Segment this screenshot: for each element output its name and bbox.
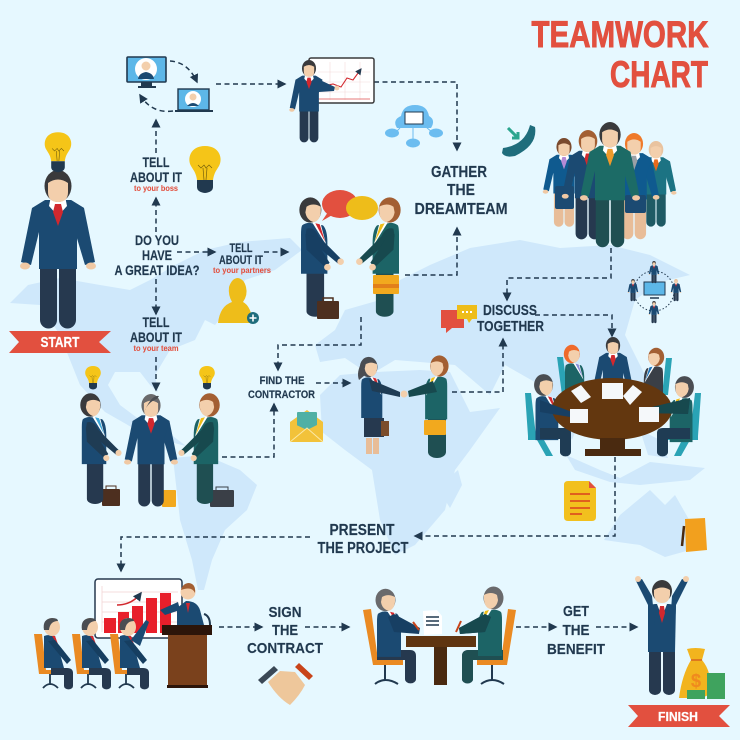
gather text: DREAMTEAM [414, 201, 508, 218]
question text: HAVE [142, 248, 172, 263]
start ribbon: START [40, 334, 80, 351]
icon: cloud network [385, 105, 443, 148]
tell boss [130, 155, 183, 193]
partner man right with orange case [356, 197, 401, 317]
present text: PRESENT [330, 522, 395, 539]
icon: document [564, 481, 596, 521]
chart board and presenter [289, 58, 374, 142]
get the benefit text: BENEFIT [547, 641, 605, 658]
sign text: SIGN [268, 604, 302, 621]
icon: envelope [290, 410, 323, 442]
meeting table scene [525, 337, 701, 456]
finish ribbon [628, 705, 730, 727]
sign text: THE [272, 622, 298, 639]
three team men [80, 393, 234, 507]
title: CHART [610, 54, 708, 95]
sign text: CONTRACT [247, 640, 323, 657]
discuss text: TOGETHER [477, 318, 544, 335]
gather text [414, 164, 508, 218]
get the benefit text [547, 603, 605, 658]
tell partners [213, 243, 272, 275]
icon: remote team network [628, 261, 681, 323]
get the benefit text: THE [562, 622, 590, 639]
icon: laptop [175, 89, 213, 112]
icon: handshake [258, 663, 313, 705]
tell boss: ABOUT IT [130, 170, 183, 185]
sign text [247, 604, 323, 657]
tell team: to your team [134, 344, 178, 353]
get the benefit text: GET [563, 603, 589, 620]
icon: phone [502, 125, 535, 157]
finish ribbon: FINISH [658, 709, 698, 724]
finish person arms raised [635, 576, 689, 695]
icon: money bag: $ [691, 671, 701, 691]
discuss text [477, 302, 544, 335]
question text: A GREAT IDEA? [114, 263, 200, 278]
find the contractor text [248, 375, 315, 401]
start ribbon [9, 331, 111, 353]
tell team: TELL [142, 315, 170, 330]
find the contractor text: CONTRACTOR [248, 389, 315, 401]
handshake pair [358, 355, 449, 458]
present text [318, 522, 409, 557]
start person [20, 170, 96, 328]
icon: bulbs over team [85, 366, 215, 390]
discuss text: DISCUSS [483, 302, 537, 319]
icon: big bulb [189, 146, 221, 193]
question text [114, 233, 200, 278]
dashed flow arrows [121, 61, 637, 627]
tell partners: TELL [230, 243, 252, 255]
find the contractor text: FIND THE [260, 375, 304, 387]
tell team: ABOUT IT [130, 330, 183, 345]
icon: video monitor [127, 57, 166, 88]
tell partners: ABOUT IT [219, 255, 263, 267]
question text: DO YOU [135, 233, 179, 248]
tell boss: to your boss [134, 184, 178, 193]
world map [10, 238, 705, 590]
title [532, 14, 709, 95]
contract table scene [363, 586, 516, 685]
partner man left with speech bubbles [299, 190, 378, 319]
gather text: THE [447, 182, 475, 199]
icon: add person [218, 278, 259, 324]
dream team group [543, 122, 677, 247]
tell team [130, 315, 183, 353]
icon: chat bubbles [441, 305, 477, 333]
icon: orange case [682, 518, 707, 552]
gather text: GATHER [431, 164, 487, 181]
tell boss: TELL [142, 155, 170, 170]
present text: THE PROJECT [318, 540, 409, 557]
icon: start bulb [45, 132, 71, 172]
presentation scene [34, 579, 212, 689]
icon: money bag [679, 648, 725, 699]
tell partners: to your partners [213, 266, 272, 275]
